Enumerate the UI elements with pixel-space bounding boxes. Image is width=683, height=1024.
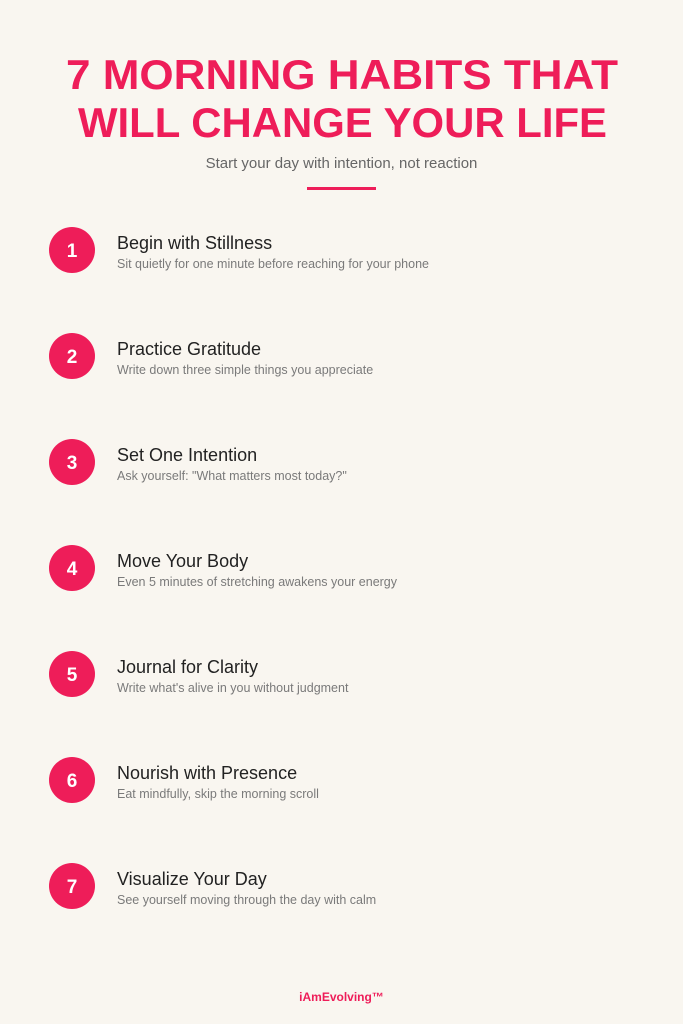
habit 5: Journal for Clarity xyxy=(117,657,258,677)
title: 7 MORNING HABITS THAT xyxy=(66,51,618,98)
habit 7 xyxy=(49,863,376,909)
habit 6: 6 xyxy=(67,771,77,792)
habit 7: See yourself moving through the day with calm xyxy=(117,893,376,907)
subtitle: Start your day with intention, not reaction xyxy=(206,155,477,172)
habit 1 xyxy=(49,227,429,273)
habit 4: Even 5 minutes of stretching awakens your energy xyxy=(117,575,398,589)
habit 1: Sit quietly for one minute before reaching for your phone xyxy=(117,257,429,271)
habit 4: 4 xyxy=(67,559,78,580)
habit 5 xyxy=(49,651,349,697)
title xyxy=(66,51,618,146)
footer brand: iAmEvolving™ xyxy=(299,990,384,1004)
habit 2: Practice Gratitude xyxy=(117,339,261,359)
divider accent xyxy=(307,187,376,190)
habit 2 xyxy=(49,333,373,379)
habit 7: Visualize Your Day xyxy=(117,869,267,889)
title: WILL CHANGE YOUR LIFE xyxy=(78,99,607,146)
habit 3: 3 xyxy=(67,453,77,474)
habit 3 xyxy=(49,439,347,485)
habit 1: Begin with Stillness xyxy=(117,233,272,253)
habit 2: Write down three simple things you appreciate xyxy=(117,363,373,377)
habit 2: 2 xyxy=(67,347,77,368)
habit 4 xyxy=(49,545,398,591)
habit 3: Ask yourself: "What matters most today?" xyxy=(117,469,347,483)
habit 5: 5 xyxy=(67,665,78,686)
habit 4: Move Your Body xyxy=(117,551,248,571)
habit 6 xyxy=(49,757,319,803)
habit 6: Nourish with Presence xyxy=(117,763,297,783)
habit 5: Write what's alive in you without judgment xyxy=(117,681,349,695)
habit 3: Set One Intention xyxy=(117,445,257,465)
habit 7: 7 xyxy=(67,877,77,898)
habit 6: Eat mindfully, skip the morning scroll xyxy=(117,787,319,801)
habit 1: 1 xyxy=(67,241,78,262)
